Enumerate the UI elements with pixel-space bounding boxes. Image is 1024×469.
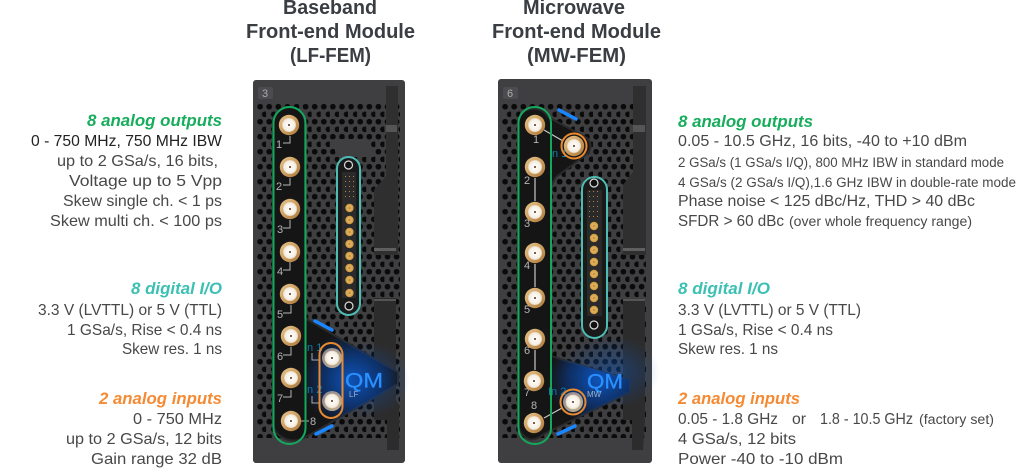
SMA input connectors: [322, 348, 342, 411]
text block: MW analog inputs: 4 GSa/s, 12 bits: [678, 431, 796, 448]
text block: LF digital I/O: [38, 279, 222, 358]
output labels: 8: [310, 416, 316, 428]
text block: LF analog outputs: 0 - 750 MHz, 750 MHz IBW: [31, 133, 223, 150]
green outline: analog outputs: [274, 107, 306, 444]
module number 3: 3: [262, 88, 268, 100]
output labels: 1: [533, 134, 539, 146]
output labels: 7: [524, 387, 530, 399]
text block: LF analog inputs: Gain range 32 dB: [91, 451, 222, 468]
text block: MW analog inputs: 2 analog inputs: [677, 389, 800, 408]
output labels: 4: [277, 266, 283, 278]
text block: MW analog outputs: 4 GSa/s (2 GSa/s I/Q),1.6 GHz IBW in double-rate mode: [678, 175, 1016, 190]
text block: MW digital I/O: [678, 279, 861, 358]
module number 6: [503, 87, 518, 100]
QM logo: QM: [587, 370, 623, 394]
output labels: 6: [524, 345, 530, 357]
text block: LF digital I/O: 1 GSa/s, Rise < 0.4 ns: [67, 322, 222, 339]
text block: MW digital I/O: 8 digital I/O: [678, 279, 770, 298]
text block: MW analog inputs: [677, 389, 994, 468]
blue glow: [306, 337, 406, 422]
output labels: 3: [524, 218, 530, 230]
input labels: In 2: [548, 386, 566, 398]
SMA output connectors: [524, 115, 545, 433]
output labels: 2: [524, 175, 530, 187]
input labels: [548, 148, 567, 398]
input labels: [304, 342, 322, 403]
text block: MW digital I/O: Skew res. 1 ns: [678, 341, 778, 358]
text block: LF digital I/O: 3.3 V (LVTTL) or 5 V (TTL): [38, 302, 222, 319]
input labels: In 2: [304, 384, 322, 396]
text block: MW digital I/O: 1 GSa/s, Rise < 0.4 ns: [678, 322, 833, 339]
text block: MW analog outputs: (over whole frequency range): [789, 214, 972, 229]
text block: LF analog inputs: up to 2 GSa/s, 12 bits: [66, 431, 222, 448]
digital connector: [582, 177, 607, 338]
text block: MW analog inputs: 0.05 - 1.8 GHz: [678, 411, 778, 428]
text block: MW analog inputs: or: [792, 411, 807, 428]
text block: LF analog outputs: Voltage up to 5 Vpp: [69, 173, 222, 190]
title: microwave module: (MW-FEM): [527, 45, 626, 67]
QM logo: MW: [587, 390, 602, 399]
LED bars: [315, 321, 332, 434]
title: baseband module: [246, 0, 415, 67]
input labels: In 1: [304, 342, 322, 354]
title: baseband module: (LF-FEM): [290, 45, 371, 67]
text block: LF analog inputs: 0 - 750 MHz: [133, 411, 222, 428]
title: microwave module: Front-end Module: [492, 21, 661, 43]
side handle: [623, 86, 646, 450]
digital connector: [337, 157, 360, 315]
title: baseband module: Front-end Module: [246, 21, 415, 43]
text block: MW digital I/O: 3.3 V (LVTTL) or 5 V (TTL): [678, 302, 861, 319]
text block: LF analog outputs: Skew single ch. < 1 ps: [63, 193, 222, 210]
output labels: 6: [277, 351, 283, 363]
output labels: 8: [531, 400, 537, 412]
orange outline: analog inputs: [320, 343, 342, 418]
blue glow: [552, 340, 656, 418]
LED bars: [558, 110, 576, 434]
side handle: [374, 86, 399, 450]
output labels: 3: [277, 224, 283, 236]
input labels: In 1: [549, 148, 567, 160]
output labels: 1: [276, 139, 282, 151]
text block: MW analog inputs: (factory set): [919, 412, 994, 427]
output labels: 2: [276, 181, 282, 193]
QM logo: [345, 370, 383, 399]
black plate: [273, 107, 398, 441]
black plate: [518, 109, 630, 440]
QM logo: LF: [349, 390, 358, 399]
orange outline: input 2: [560, 390, 586, 414]
text block: MW analog inputs: 1.8 - 10.5 GHz: [820, 411, 913, 428]
panel: LF module: [253, 80, 410, 463]
text block: MW analog outputs: 0.05 - 10.5 GHz, 16 bits, -40 to +10 dBm: [678, 133, 967, 150]
module number 3: [258, 87, 273, 100]
text block: LF digital I/O: Skew res. 1 ns: [122, 341, 222, 358]
module number 6: 6: [507, 88, 513, 100]
orange outline: input 1: [562, 134, 586, 158]
panel: MW module: [498, 79, 660, 463]
SMA output connectors: [279, 115, 301, 431]
text block: MW analog outputs: 2 GSa/s (1 GSa/s I/Q), 800 MHz IBW in standard mode: [678, 155, 1004, 170]
output labels: 5: [524, 304, 530, 316]
text block: MW analog outputs: [678, 112, 1016, 230]
text block: LF analog outputs: 8 analog outputs: [87, 111, 222, 130]
text block: LF digital I/O: 8 digital I/O: [131, 279, 222, 298]
text block: MW analog outputs: Phase noise < 125 dBc/Hz, THD > 40 dBc: [678, 193, 975, 210]
text block: LF analog outputs: Skew multi ch. < 100 ps: [50, 213, 222, 230]
SMA input connectors: [563, 136, 584, 412]
QM logo: QM: [345, 370, 383, 392]
green outline: analog outputs: [518, 107, 551, 444]
text block: MW analog outputs: SFDR > 60 dBc: [678, 213, 784, 230]
text block: MW analog inputs: Power -40 to -10 dBm: [678, 451, 843, 468]
text block: LF analog inputs: [66, 389, 222, 468]
text block: LF analog inputs: 2 analog inputs: [98, 389, 222, 408]
output labels: [276, 136, 316, 428]
output labels: 4: [524, 260, 530, 272]
text block: MW analog outputs: 8 analog outputs: [678, 112, 813, 131]
text block: LF analog outputs: [31, 111, 223, 230]
title: microwave module: [492, 0, 661, 67]
output labels: 7: [277, 393, 283, 405]
text block: LF analog outputs: up to 2 GSa/s, 16 bits,: [57, 153, 218, 170]
output labels: [524, 130, 563, 418]
output labels: 5: [277, 309, 283, 321]
